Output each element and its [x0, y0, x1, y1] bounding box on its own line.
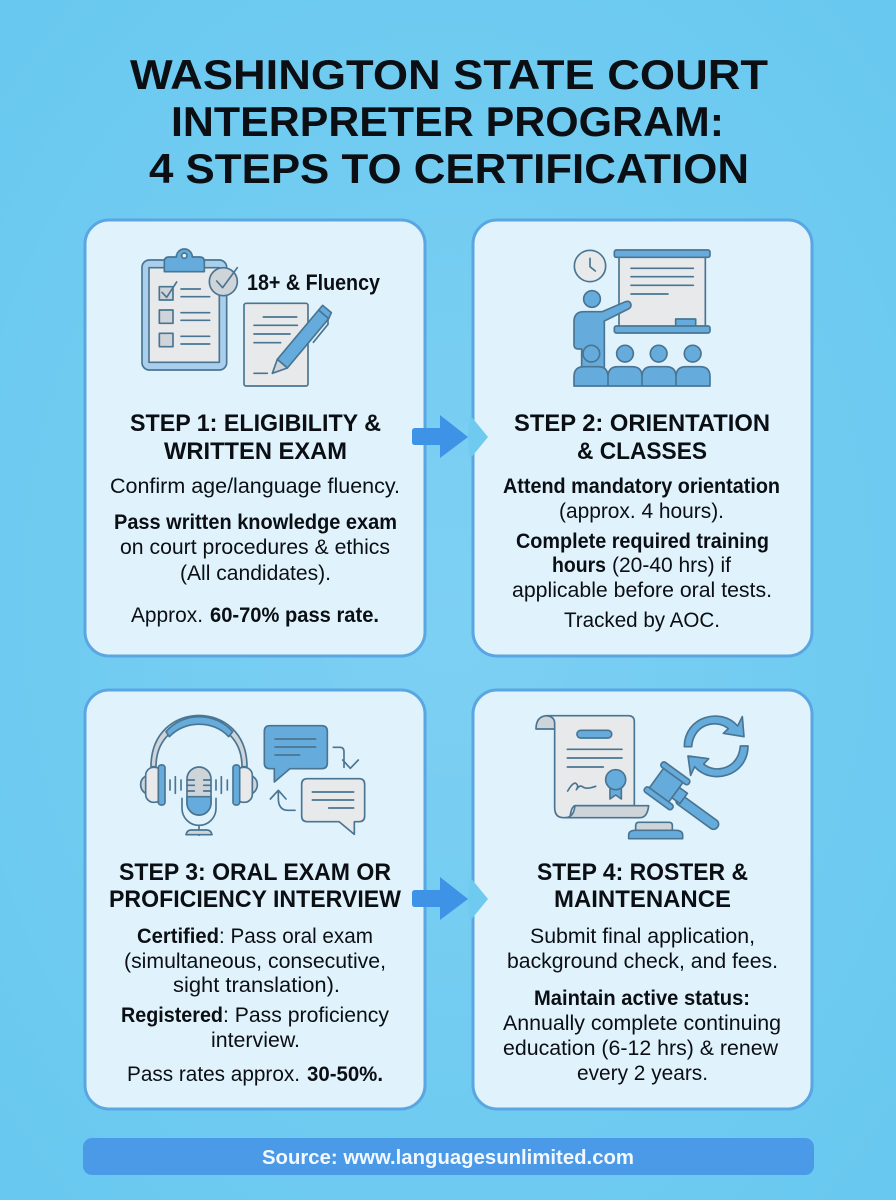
- heading: MAINTENANCE: [554, 886, 731, 913]
- text block: : Pass oral exam: [219, 925, 373, 948]
- text block: 60-70% pass rate.: [210, 604, 379, 627]
- heading: [130, 410, 381, 465]
- text block: [503, 925, 781, 1085]
- text block: Tracked by AOC.: [564, 609, 720, 632]
- arrow: step 3 to step 4: [412, 877, 488, 921]
- text block: applicable before oral tests.: [512, 579, 772, 602]
- title: WASHINGTON STATE COURT: [130, 51, 768, 98]
- text block: [121, 925, 389, 1086]
- text block: Submit final application,: [530, 925, 755, 948]
- text block: [503, 475, 780, 632]
- text block: (20-40 hrs) if: [612, 554, 731, 577]
- text block: Complete required training: [516, 530, 769, 553]
- text block: (approx. 4 hours).: [559, 500, 724, 523]
- heading: STEP 1: ELIGIBILITY &: [130, 410, 381, 437]
- text block: 30-50%.: [307, 1063, 383, 1086]
- text block: Pass rates approx.: [127, 1063, 300, 1086]
- text block: : Pass proficiency: [223, 1004, 389, 1027]
- text block: interview.: [211, 1029, 300, 1052]
- text block: [110, 475, 400, 627]
- text block: Approx.: [131, 604, 203, 627]
- source bar: Source: www.languagesunlimited.com: [262, 1147, 634, 1169]
- heading: STEP 4: ROSTER &: [537, 859, 748, 886]
- heading: [109, 859, 401, 913]
- panel: step 3: [85, 690, 425, 1109]
- text block: Registered: [121, 1004, 223, 1027]
- text block: Annually complete continuing: [503, 1012, 781, 1035]
- title: 4 STEPS TO CERTIFICATION: [149, 145, 749, 192]
- icon: clipboard and written exam: [142, 249, 331, 386]
- text block: (All candidates).: [180, 562, 331, 585]
- panel: step 2: [473, 220, 812, 656]
- text block: hours: [552, 554, 606, 577]
- text block: Certified: [137, 925, 219, 948]
- text block: background check, and fees.: [507, 950, 778, 973]
- heading: [537, 859, 748, 913]
- heading: STEP 3: ORAL EXAM OR: [119, 859, 391, 886]
- panel: step 1: [85, 220, 425, 656]
- icon: certificate, gavel and renewal arrows: [536, 716, 748, 839]
- text block: sight translation).: [173, 974, 340, 997]
- text block: Confirm age/language fluency.: [110, 475, 400, 498]
- icon label: 18+ & Fluency: [247, 270, 381, 295]
- icon: headset, microphone and speech bubbles: [141, 715, 365, 835]
- text block: Maintain active status:: [534, 987, 750, 1010]
- text block: every 2 years.: [577, 1062, 708, 1085]
- text block: education (6-12 hrs) & renew: [503, 1037, 779, 1060]
- title: [130, 51, 768, 192]
- heading: & CLASSES: [577, 438, 707, 465]
- title: INTERPRETER PROGRAM:: [171, 98, 724, 145]
- source bar: [83, 1138, 814, 1175]
- text block: Attend mandatory orientation: [503, 475, 780, 498]
- heading: WRITTEN EXAM: [164, 438, 347, 465]
- icon: classroom presentation: [574, 250, 710, 386]
- heading: STEP 2: ORIENTATION: [514, 410, 770, 437]
- text block: (simultaneous, consecutive,: [124, 950, 386, 973]
- arrow: step 1 to step 2: [412, 415, 488, 459]
- heading: PROFICIENCY INTERVIEW: [109, 886, 401, 913]
- panel: step 4: [473, 690, 812, 1109]
- text block: Pass written knowledge exam: [114, 511, 397, 534]
- text block: on court procedures & ethics: [120, 536, 390, 559]
- heading: [514, 410, 770, 465]
